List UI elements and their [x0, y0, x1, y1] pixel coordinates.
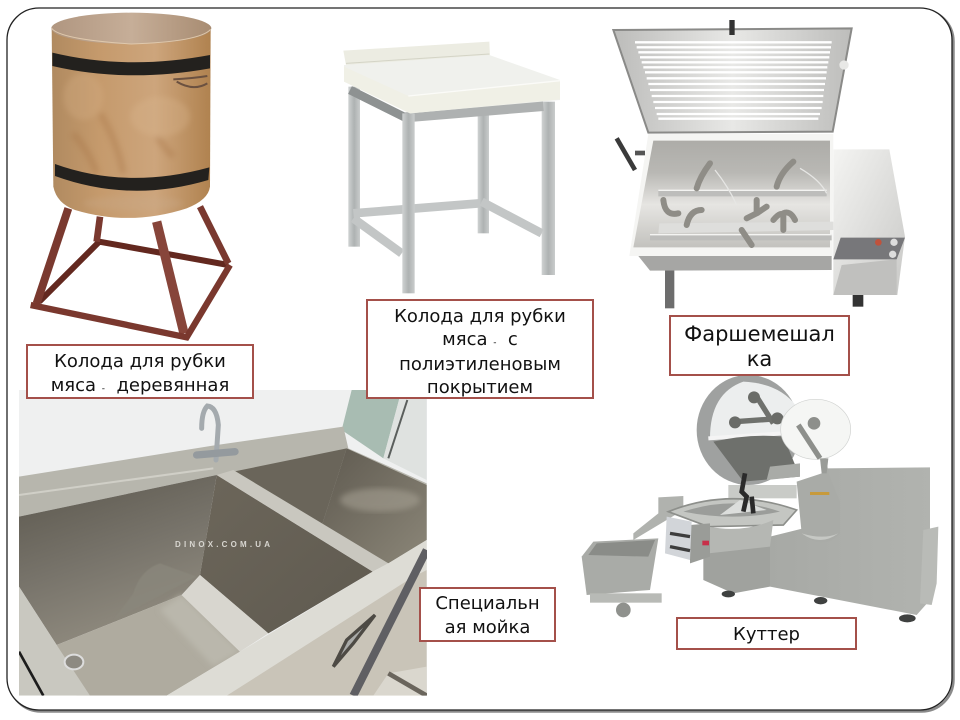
open lid	[697, 375, 800, 485]
icon: wooden chopping block	[31, 13, 230, 337]
label: special sink	[419, 587, 556, 642]
watermark: DINOX.COM.UA	[175, 540, 270, 549]
left basin	[19, 475, 217, 645]
label: wooden block: Колода для рубки	[54, 351, 226, 372]
label: cutter: Куттер	[733, 624, 800, 645]
feet	[722, 591, 735, 597]
label: wooden block	[26, 344, 254, 399]
label: mixer: ка	[747, 347, 772, 371]
white disc	[781, 399, 851, 459]
lid	[613, 28, 852, 133]
ramp and cart	[633, 496, 683, 540]
front rim and face	[167, 540, 427, 696]
window and frame	[342, 390, 402, 458]
table legs and rails	[348, 87, 360, 247]
motor cylinder	[797, 460, 840, 542]
tub	[629, 134, 833, 256]
legs	[665, 270, 674, 308]
splash rim	[19, 426, 427, 540]
label: mixer	[669, 315, 850, 376]
bowl	[668, 499, 797, 527]
label: special sink: Специальн	[435, 593, 540, 614]
icon: sink photo	[19, 390, 427, 696]
label: polyethylene block	[366, 299, 594, 399]
right basin	[233, 448, 347, 526]
label: wooden block: мяса - деревянная	[51, 375, 229, 396]
icon: meat mixer	[613, 20, 905, 308]
faucet	[197, 406, 235, 460]
barrel	[52, 28, 211, 218]
blade arm	[742, 473, 753, 513]
label: polyethylene block: полиэтиленовым	[399, 354, 561, 375]
label: special sink: ая мойка	[445, 617, 530, 638]
label: polyethylene block: мяса - с	[442, 328, 518, 350]
icon: bowl cutter	[582, 375, 938, 622]
metal bands	[52, 53, 210, 75]
label: cutter	[676, 617, 857, 650]
machine body	[770, 467, 930, 615]
stand	[31, 207, 230, 337]
label: mixer: Фаршемешал	[684, 322, 835, 346]
side control box	[833, 149, 905, 295]
knob and handle	[729, 20, 735, 35]
label: polyethylene block: Колода для рубки	[394, 306, 566, 327]
label: polyethylene block: покрытием	[427, 376, 533, 398]
divider	[217, 470, 388, 572]
icon: polyethylene cutting table	[343, 42, 560, 293]
polyethylene slab	[343, 42, 490, 65]
